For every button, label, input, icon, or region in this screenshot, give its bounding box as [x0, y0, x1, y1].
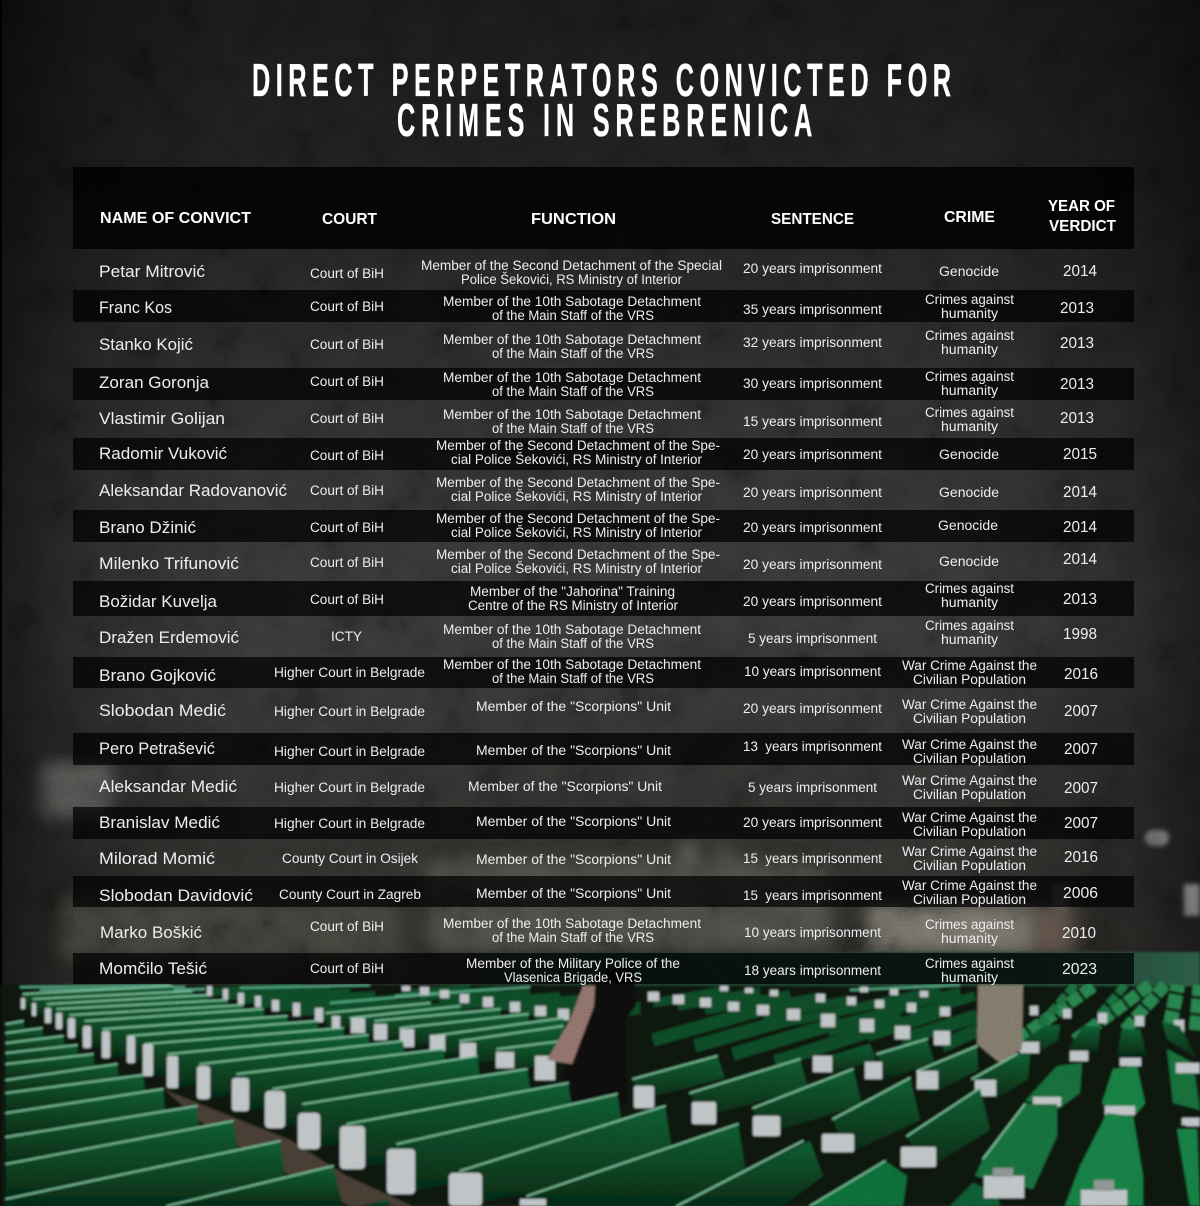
row: Momčilo Tešić: Court of BiH — [310, 961, 384, 976]
row: Marko Boškić — [73, 907, 1134, 953]
row: Momčilo Tešić: Momčilo Tešić — [99, 959, 208, 978]
row: Stanko Kojić: Court of BiH — [310, 337, 384, 352]
row: Božidar Kuvelja — [73, 581, 1134, 616]
row: Stanko Kojić: 32 years imprisonment — [743, 335, 882, 350]
row: Pero Petrašević: Civilian Population — [913, 751, 1026, 766]
row: Brano Gojković — [73, 657, 1134, 688]
row: Radomir Vuković: cial Police Šekovići, RS Ministry of Interior — [451, 452, 703, 467]
row: Milenko Trifunović: Member of the Second Detachment of the Spe- — [436, 547, 720, 562]
row: Petar Mitrović: 2014 — [1063, 263, 1097, 280]
row: Dražen Erdemović: ICTY — [331, 629, 362, 644]
row: Zoran Goronja: Member of the 10th Sabotage Detachment — [443, 370, 701, 385]
row: Zoran Goronja — [73, 368, 1134, 400]
row: Vlastimir Golijan: Vlastimir Golijan — [99, 409, 225, 428]
row: Pero Petrašević: Member of the "Scorpions" Unit — [476, 743, 671, 758]
row: Franc Kos: of the Main Staff of the VRS — [492, 308, 654, 323]
row: Petar Mitrović: Genocide — [939, 264, 999, 279]
row: Marko Boškić: Crimes against — [925, 917, 1014, 932]
row: Pero Petrašević: War Crime Against the — [902, 737, 1037, 752]
row: Slobodan Medić: 20 years imprisonment — [743, 701, 882, 716]
row: Dražen Erdemović — [73, 616, 1134, 657]
row: Brano Gojković: Higher Court in Belgrade — [274, 665, 425, 680]
row: Zoran Goronja: Crimes against — [925, 369, 1014, 384]
row: Aleksandar Medić: Aleksandar Medić — [99, 777, 238, 796]
row: Dražen Erdemović: Dražen Erdemović — [99, 628, 239, 647]
row: Momčilo Tešić: humanity — [941, 970, 998, 985]
row: Milenko Trifunović: cial Police Šekovići, RS Ministry of Interior — [451, 561, 703, 576]
row: Zoran Goronja: Zoran Goronja — [99, 373, 210, 392]
row: Petar Mitrović: 20 years imprisonment — [743, 261, 882, 276]
left edge block of coffins — [6, 1021, 390, 1206]
row: Franc Kos: Court of BiH — [310, 299, 384, 314]
row: Stanko Kojić: humanity — [941, 342, 998, 357]
row: Milorad Momić: Milorad Momić — [99, 849, 216, 868]
title: CRIMES IN SREBRENICA — [397, 94, 812, 146]
row: Aleksandar Radovanović: Genocide — [939, 485, 999, 500]
row: Zoran Goronja: 30 years imprisonment — [743, 376, 882, 391]
row: Momčilo Tešić: Vlasenica Brigade, VRS — [504, 970, 642, 985]
row: Milenko Trifunović: 20 years imprisonment — [743, 557, 882, 572]
row: Radomir Vuković: Radomir Vuković — [99, 444, 227, 463]
row: Božidar Kuvelja: Member of the "Jahorina" Training — [470, 584, 675, 599]
row: Slobodan Davidović: War Crime Against the — [902, 878, 1037, 893]
row: Slobodan Davidović: County Court in Zagreb — [279, 887, 421, 902]
row: Aleksandar Medić: Member of the "Scorpions" Unit — [468, 779, 662, 794]
row: Radomir Vuković: Court of BiH — [310, 448, 384, 463]
row: Slobodan Medić — [73, 688, 1134, 733]
row: Vlastimir Golijan: humanity — [941, 419, 998, 434]
row: Branislav Medić: Branislav Medić — [99, 813, 220, 832]
photo: rows of green coffins — [0, 952, 1200, 1206]
row: Milorad Momić: 15 years imprisonment — [743, 851, 882, 866]
table header row: SENTENCE — [771, 211, 854, 228]
row: Vlastimir Golijan: Crimes against — [925, 405, 1014, 420]
table header row: COURT — [322, 211, 377, 228]
row: Stanko Kojić: Stanko Kojić — [99, 335, 193, 354]
row: Stanko Kojić: Member of the 10th Sabotage Detachment — [443, 332, 701, 347]
row: Momčilo Tešić: 18 years imprisonment — [744, 963, 881, 978]
row: Slobodan Medić: 2007 — [1064, 703, 1098, 720]
row: Aleksandar Radovanović: cial Police Šekovići, RS Ministry of Interior — [451, 489, 703, 504]
row: Brano Džinić: Brano Džinić — [99, 518, 197, 537]
row: Brano Džinić — [73, 510, 1134, 542]
row: Aleksandar Medić: Higher Court in Belgrade — [274, 780, 425, 795]
row: Franc Kos: 2013 — [1060, 300, 1094, 317]
row: Petar Mitrović: Court of BiH — [310, 266, 384, 281]
row: Dražen Erdemović: humanity — [941, 632, 998, 647]
row: Božidar Kuvelja: 20 years imprisonment — [743, 594, 882, 609]
row: Marko Boškić: Court of BiH — [310, 919, 384, 934]
figure of a woman among the coffins — [547, 960, 636, 1105]
row: Marko Boškić: 10 years imprisonment — [744, 925, 881, 940]
row: Brano Gojković: 10 years imprisonment — [744, 664, 881, 679]
row: Brano Džinić: Member of the Second Detachment of the Spe- — [436, 511, 720, 526]
row: Milorad Momić: 2016 — [1064, 849, 1098, 866]
row: Slobodan Davidović: 15 years imprisonment — [743, 888, 882, 903]
row: Franc Kos: Member of the 10th Sabotage Detachment — [443, 294, 701, 309]
row: Pero Petrašević: 2007 — [1064, 741, 1098, 758]
row: Aleksandar Radovanović: Member of the Second Detachment of the Spe- — [436, 475, 720, 490]
row: Milorad Momić: Member of the "Scorpions" Unit — [476, 852, 671, 867]
table header row: NAME OF CONVICT — [100, 210, 251, 227]
row: Aleksandar Radovanović: 2014 — [1063, 484, 1097, 501]
row: Radomir Vuković: 20 years imprisonment — [743, 447, 882, 462]
row: Petar Mitrović: Member of the Second Detachment of the Special — [421, 258, 722, 273]
row: Slobodan Davidović: Member of the "Scorpions" Unit — [476, 886, 671, 901]
row: Božidar Kuvelja: Božidar Kuvelja — [99, 592, 218, 611]
row: Dražen Erdemović: Crimes against — [925, 618, 1014, 633]
row: Franc Kos: Crimes against — [925, 292, 1014, 307]
row: Vlastimir Golijan: 15 years imprisonment — [743, 414, 882, 429]
row: Brano Džinić: 20 years imprisonment — [743, 520, 882, 535]
row: Stanko Kojić: Crimes against — [925, 328, 1014, 343]
row: Slobodan Medić: Higher Court in Belgrade — [274, 704, 425, 719]
row: Momčilo Tešić — [73, 953, 1134, 985]
row: Petar Mitrović: Petar Mitrović — [99, 262, 205, 281]
table of convictions — [73, 167, 1134, 985]
row: Zoran Goronja: humanity — [941, 383, 998, 398]
row: Zoran Goronja: of the Main Staff of the VRS — [492, 384, 654, 399]
row: Momčilo Tešić: Crimes against — [925, 956, 1014, 971]
row: Slobodan Davidović: Civilian Population — [913, 892, 1026, 907]
row: Branislav Medić: War Crime Against the — [902, 810, 1037, 825]
main block of coffins with name plates — [21, 986, 1200, 1206]
row: Brano Džinić: cial Police Šekovići, RS Ministry of Interior — [451, 525, 703, 540]
row: Božidar Kuvelja: humanity — [941, 595, 998, 610]
row: Marko Boškić: Member of the 10th Sabotage Detachment — [443, 916, 701, 931]
row: Aleksandar Medić: War Crime Against the — [902, 773, 1037, 788]
row: Milenko Trifunović — [73, 542, 1134, 580]
row: Vlastimir Golijan: Member of the 10th Sabotage Detachment — [443, 407, 701, 422]
row: Branislav Medić: 2007 — [1064, 815, 1098, 832]
row: Marko Boškić: humanity — [941, 931, 998, 946]
row: Aleksandar Medić: Civilian Population — [913, 787, 1026, 802]
row: Vlastimir Golijan: of the Main Staff of the VRS — [492, 421, 654, 436]
row: Aleksandar Radovanović: 20 years imprisonment — [743, 485, 882, 500]
row: Milorad Momić — [73, 839, 1134, 876]
row: Aleksandar Radovanović: Aleksandar Radovanović — [99, 481, 287, 500]
row: Milenko Trifunović: Court of BiH — [310, 555, 384, 570]
row: Petar Mitrović: Police Šekovići, RS Ministry of Interior — [461, 272, 682, 287]
row: Milorad Momić: County Court in Osijek — [282, 851, 418, 866]
row: Franc Kos: 35 years imprisonment — [743, 302, 882, 317]
row: Franc Kos: Franc Kos — [99, 298, 172, 317]
row: Milenko Trifunović: Milenko Trifunović — [99, 554, 240, 573]
row: Stanko Kojić: 2013 — [1060, 335, 1094, 352]
row: Božidar Kuvelja: Crimes against — [925, 581, 1014, 596]
row: Božidar Kuvelja: 2013 — [1063, 591, 1097, 608]
row: Slobodan Davidović: Slobodan Davidović — [99, 886, 254, 905]
row: Slobodan Medić: Member of the "Scorpions" Unit — [476, 699, 671, 714]
far coffins, back rows — [20, 985, 1200, 1062]
row: Aleksandar Radovanović: Court of BiH — [310, 483, 384, 498]
row: Radomir Vuković: Genocide — [939, 447, 999, 462]
row: Božidar Kuvelja: Centre of the RS Ministry of Interior — [468, 598, 678, 613]
row: Milenko Trifunović: Genocide — [939, 554, 999, 569]
row: Slobodan Medić: War Crime Against the — [902, 697, 1037, 712]
row: Milenko Trifunović: 2014 — [1063, 551, 1097, 568]
row: Dražen Erdemović: of the Main Staff of the VRS — [492, 636, 654, 651]
table header row: CRIME — [944, 209, 995, 226]
row: Milorad Momić: War Crime Against the — [902, 844, 1037, 859]
title: DIRECT PERPETRATORS CONVICTED FOR — [252, 54, 951, 106]
row: Marko Boškić: 2010 — [1062, 925, 1096, 942]
row: Petar Mitrović — [73, 250, 1134, 290]
row: Branislav Medić: Member of the "Scorpions" Unit — [476, 814, 671, 829]
row: Aleksandar Medić: 5 years imprisonment — [748, 780, 877, 795]
row: Radomir Vuković: Member of the Second Detachment of the Spe- — [436, 438, 720, 453]
table header row — [73, 167, 1134, 249]
second block of coffins, left of the figure — [326, 1003, 574, 1080]
row: Vlastimir Golijan — [73, 400, 1134, 438]
row: Aleksandar Medić: 2007 — [1064, 780, 1098, 797]
row: Branislav Medić: Civilian Population — [913, 824, 1026, 839]
title — [252, 54, 951, 146]
row: Brano Gojković: 2016 — [1064, 666, 1098, 683]
row: Aleksandar Medić — [73, 765, 1134, 807]
row: Zoran Goronja: Court of BiH — [310, 374, 384, 389]
row: Dražen Erdemović: 1998 — [1063, 626, 1097, 643]
row: Brano Džinić: Court of BiH — [310, 520, 384, 535]
row: Pero Petrašević: 13 years imprisonment — [743, 739, 882, 754]
row: Brano Gojković: of the Main Staff of the VRS — [492, 671, 654, 686]
row: Momčilo Tešić: 2023 — [1062, 961, 1097, 978]
row: Brano Gojković: War Crime Against the — [902, 658, 1037, 673]
row: Slobodan Medić: Slobodan Medić — [99, 701, 227, 720]
row: Brano Gojković: Member of the 10th Sabotage Detachment — [443, 657, 701, 672]
row: Momčilo Tešić: Member of the Military Police of the — [466, 956, 680, 971]
row: Branislav Medić: 20 years imprisonment — [743, 815, 882, 830]
row: Slobodan Medić: Civilian Population — [913, 711, 1026, 726]
row: Franc Kos: humanity — [941, 306, 998, 321]
row: Pero Petrašević: Pero Petrašević — [99, 739, 215, 758]
row: Branislav Medić: Higher Court in Belgrade — [274, 816, 425, 831]
row: Branislav Medić — [73, 807, 1134, 839]
table header row: YEAR OF — [1048, 198, 1115, 215]
row: Marko Boškić: Marko Boškić — [100, 923, 202, 942]
row: Stanko Kojić: of the Main Staff of the VRS — [492, 346, 654, 361]
row: Vlastimir Golijan: Court of BiH — [310, 411, 384, 426]
row: Slobodan Davidović — [73, 876, 1134, 907]
row: Radomir Vuković: 2015 — [1063, 446, 1097, 463]
row: Dražen Erdemović: Member of the 10th Sabotage Detachment — [443, 622, 701, 637]
row: Franc Kos — [73, 290, 1134, 323]
pillar — [977, 985, 1023, 1063]
row: Radomir Vuković — [73, 438, 1134, 470]
right block, row behind the front row — [813, 1021, 1200, 1125]
row: Marko Boškić: of the Main Staff of the VRS — [492, 930, 654, 945]
table header row: FUNCTION — [531, 211, 616, 228]
row: Aleksandar Radovanović — [73, 470, 1134, 510]
row: Vlastimir Golijan: 2013 — [1060, 410, 1094, 427]
row: Brano Džinić: 2014 — [1063, 519, 1097, 536]
row: Zoran Goronja: 2013 — [1060, 376, 1094, 393]
row: Stanko Kojić — [73, 322, 1134, 368]
row: Dražen Erdemović: 5 years imprisonment — [748, 631, 877, 646]
row: Slobodan Davidović: 2006 — [1063, 885, 1098, 902]
row: Pero Petrašević: Higher Court in Belgrade — [274, 744, 425, 759]
row: Brano Džinić: Genocide — [938, 518, 998, 533]
table header row: VERDICT — [1049, 218, 1116, 235]
row: Milorad Momić: Civilian Population — [913, 858, 1026, 873]
row: Božidar Kuvelja: Court of BiH — [310, 592, 384, 607]
row: Brano Gojković: Civilian Population — [913, 672, 1026, 687]
row: Brano Gojković: Brano Gojković — [99, 666, 216, 685]
row: Pero Petrašević — [73, 733, 1134, 766]
